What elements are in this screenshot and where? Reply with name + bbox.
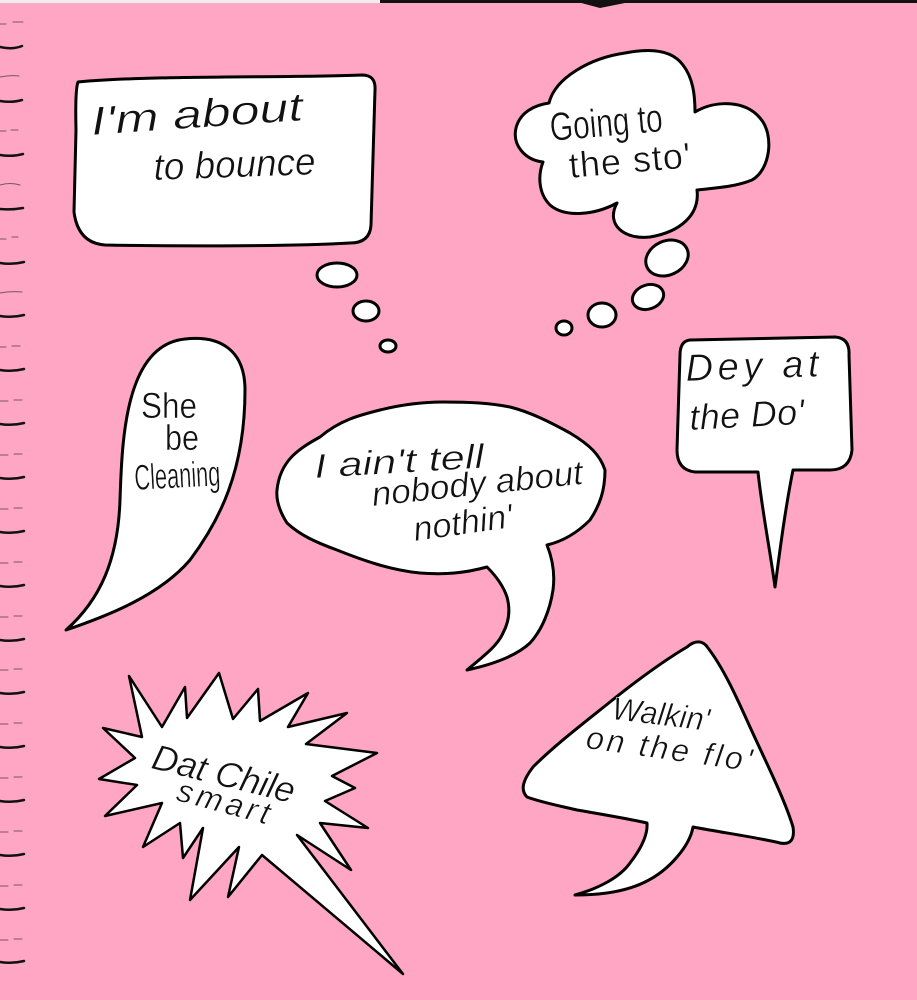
caption: on the flo' xyxy=(584,719,756,778)
caption xyxy=(313,438,586,549)
caption xyxy=(548,96,692,186)
caption xyxy=(584,690,756,778)
bubble: Going to the sto' xyxy=(515,51,769,335)
thought dots xyxy=(317,263,396,352)
spiral binding marks xyxy=(0,22,24,963)
bubble: I ain't tell nobody about nothin' xyxy=(277,402,605,670)
caption: Going to xyxy=(548,96,664,150)
caption xyxy=(90,85,316,189)
caption: Dat Chile xyxy=(148,736,300,811)
torn top edge xyxy=(0,0,917,8)
caption: the sto' xyxy=(567,134,692,186)
bubble: Dey at the Do' xyxy=(677,337,852,587)
caption: I ain't tell xyxy=(313,438,487,486)
caption: smart xyxy=(173,772,275,832)
caption: be xyxy=(165,417,199,458)
bubble: Walkin' on the flo' xyxy=(523,642,793,895)
caption xyxy=(685,343,821,438)
thought dots xyxy=(556,233,694,335)
caption xyxy=(133,385,221,498)
caption: to bounce xyxy=(153,141,316,189)
caption: Cleaning xyxy=(133,453,221,498)
caption: She xyxy=(141,385,197,426)
bubble: Dat Chile smart xyxy=(99,673,403,974)
bubble: I'm about to bounce xyxy=(74,75,396,352)
caption: nothin' xyxy=(411,497,517,549)
caption: Walkin' xyxy=(610,690,714,738)
caption: Dey at xyxy=(685,343,821,390)
caption: I'm about xyxy=(90,85,307,144)
caption: nobody about xyxy=(370,454,586,514)
bubble: She be cleaning xyxy=(66,338,245,630)
caption: the Do' xyxy=(688,391,806,438)
